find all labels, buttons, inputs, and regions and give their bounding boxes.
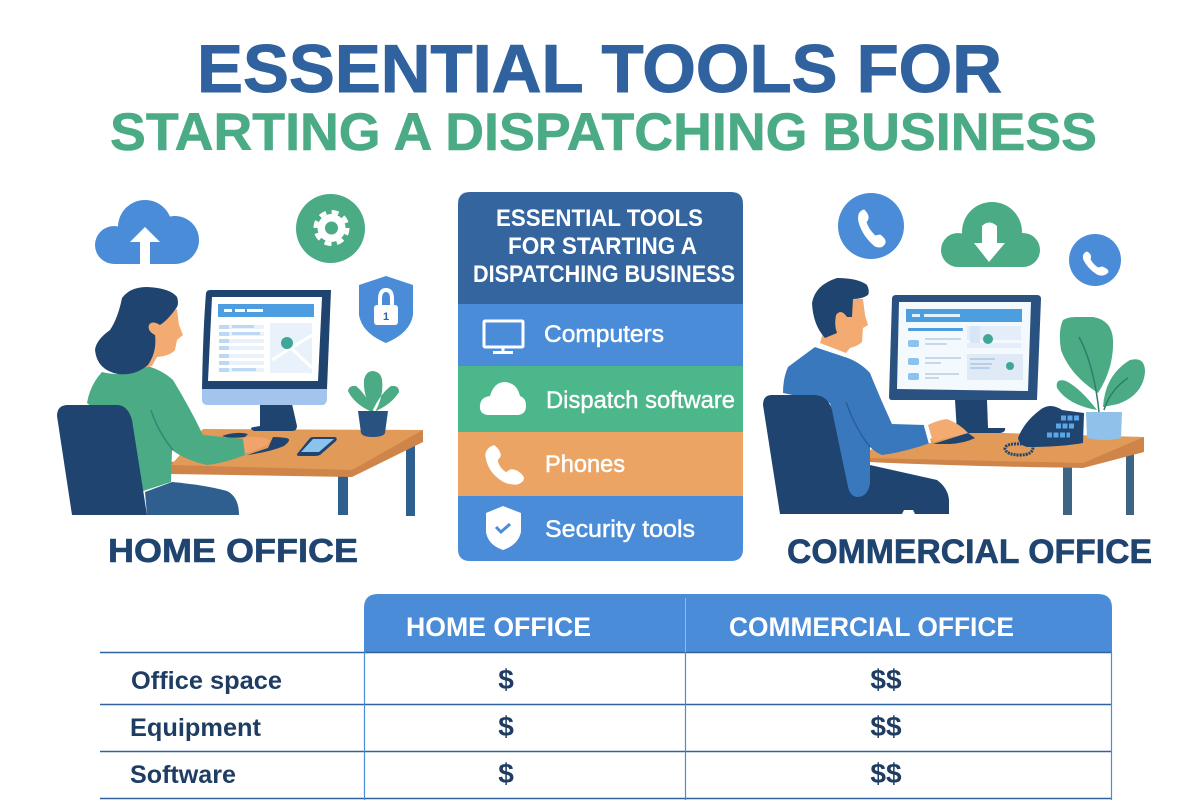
title line 2: STARTING A DISPATCHING BUSINESS xyxy=(110,103,1097,162)
illustration: woman's sweater xyxy=(87,366,245,491)
illustration: woman's legs xyxy=(145,482,239,515)
icon: security shield xyxy=(486,506,521,550)
illustration: smartphone xyxy=(297,437,337,456)
row: equipment: $$ xyxy=(870,711,902,742)
icon: phone xyxy=(486,446,523,484)
title xyxy=(110,31,1097,162)
row: office space: Office space xyxy=(131,667,282,695)
panel: home office scene xyxy=(57,194,423,569)
panel: essential tools list xyxy=(458,192,743,561)
row: software: Software xyxy=(130,761,236,789)
icon: phone circle large xyxy=(838,193,904,259)
row: equipment xyxy=(130,711,902,742)
title line 1: ESSENTIAL TOOLS FOR xyxy=(197,31,1002,107)
illustration: keyboard, mouse and hand xyxy=(222,433,289,455)
table header labels: COMMERCIAL OFFICE xyxy=(729,612,1014,642)
illustration: monitor xyxy=(202,290,331,431)
illustration: office chair xyxy=(763,395,853,514)
panel background bands xyxy=(458,192,743,561)
row: office space: $$ xyxy=(870,664,902,695)
table grid lines xyxy=(100,598,1112,800)
item: computers: Computers xyxy=(544,321,664,348)
icon: cloud xyxy=(480,382,526,415)
illustration: woman's head and hair xyxy=(95,287,183,374)
icon: security shield with lock xyxy=(359,276,413,343)
icon: cloud download xyxy=(941,202,1040,267)
illustration: man's suit xyxy=(783,347,930,497)
illustration: desk telephone xyxy=(1005,406,1084,455)
row: office space xyxy=(131,664,902,695)
illustration: man's hand and mouse xyxy=(928,419,975,444)
comparison table xyxy=(100,594,1112,800)
panel heading: DISPATCHING BUSINESS xyxy=(473,261,735,288)
panel heading: ESSENTIAL TOOLS xyxy=(496,205,703,232)
panel heading xyxy=(473,205,735,288)
row: software xyxy=(130,758,902,789)
panel: commercial office scene xyxy=(763,193,1152,571)
row: equipment: $ xyxy=(498,711,514,742)
illustration: office chair xyxy=(57,405,147,515)
row: office space: $ xyxy=(498,664,514,695)
table header labels: HOME OFFICE xyxy=(406,612,591,642)
icon: cloud upload xyxy=(95,200,199,264)
row: software: $$ xyxy=(870,758,902,789)
illustration: desk xyxy=(171,429,423,516)
label: commercial office: COMMERCIAL OFFICE xyxy=(787,533,1152,571)
row: equipment: Equipment xyxy=(130,714,262,742)
icon: phone circle small xyxy=(1069,234,1121,286)
illustration: man's legs xyxy=(800,450,949,514)
icon: gear xyxy=(296,194,365,263)
icon: security shield with lock: 1 xyxy=(383,311,389,323)
label: home office: HOME OFFICE xyxy=(108,532,358,569)
illustration: potted plant xyxy=(1057,317,1145,440)
illustration: desk xyxy=(869,432,1144,515)
item: dispatch software: Dispatch software xyxy=(546,387,735,414)
table header labels xyxy=(406,612,1014,642)
row: software: $ xyxy=(498,758,514,789)
item: security tools: Security tools xyxy=(545,516,695,543)
item: phones: Phones xyxy=(545,451,625,478)
panel heading: FOR STARTING A xyxy=(508,233,697,260)
illustration: man's head and shirt xyxy=(812,278,869,357)
illustration: monitor xyxy=(889,295,1041,433)
illustration: potted plant xyxy=(348,371,399,437)
icon: computer xyxy=(484,321,523,352)
table header xyxy=(364,594,1112,652)
